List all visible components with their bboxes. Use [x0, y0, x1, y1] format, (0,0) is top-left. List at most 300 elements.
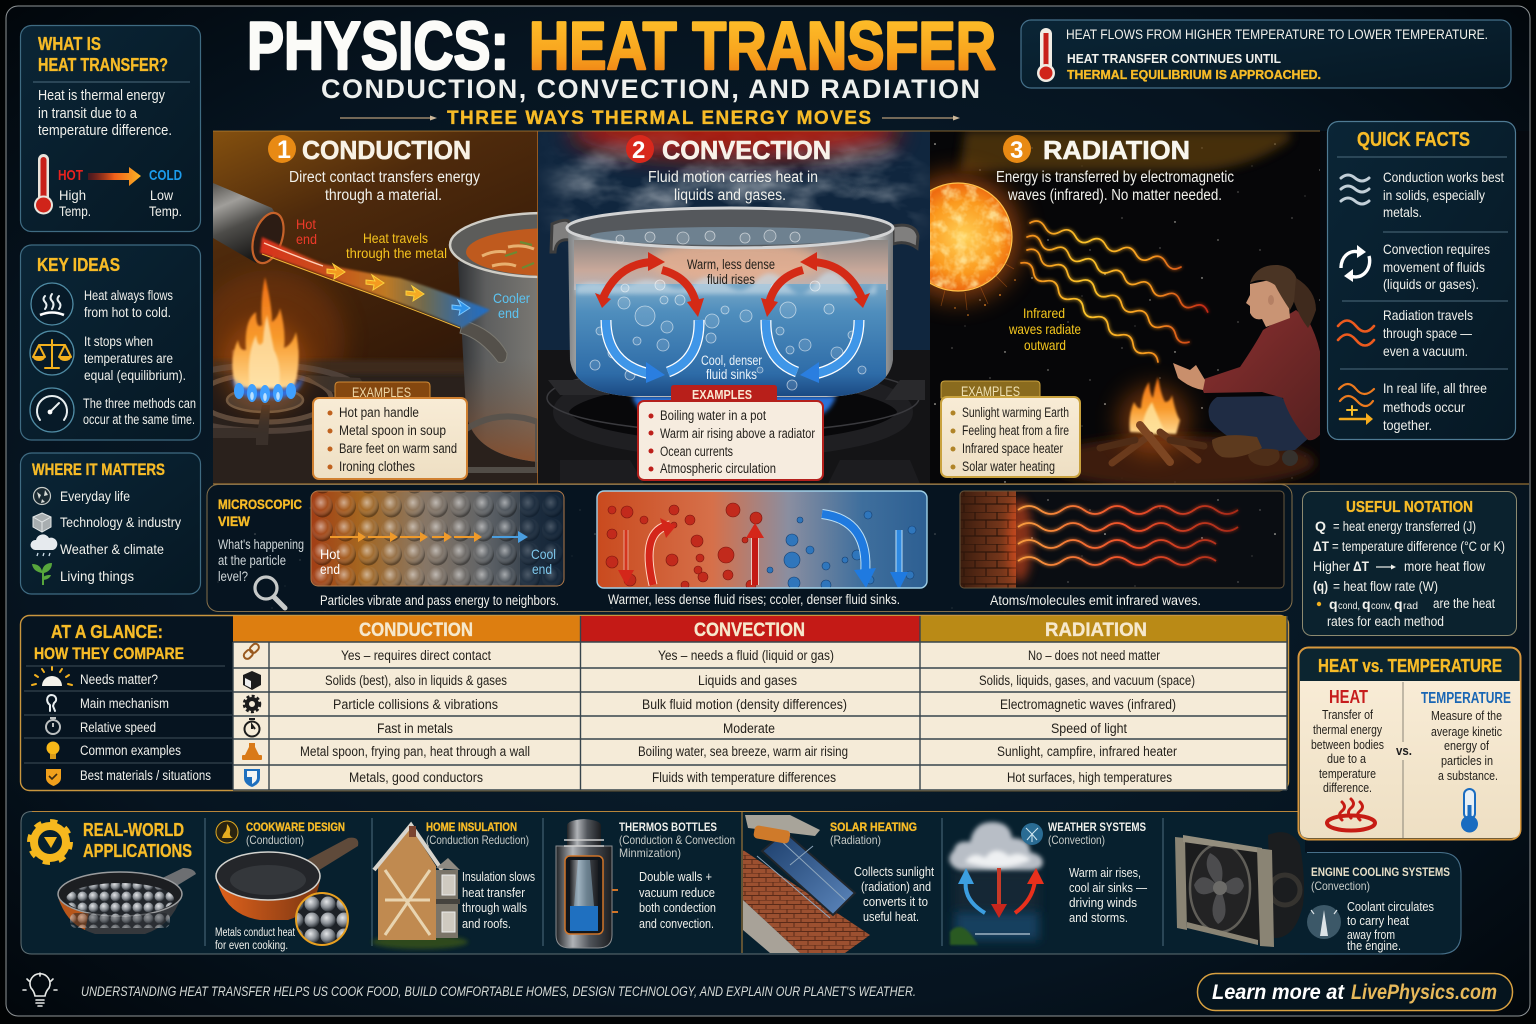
fact 1: metals. [1383, 204, 1422, 220]
weather text: driving winds [1069, 895, 1137, 910]
examples: convection: Atmospheric circulation [660, 461, 776, 476]
table header: CONVECTION [694, 620, 805, 641]
solar text: useful heat. [863, 909, 919, 924]
panel: useful notation [1302, 492, 1516, 636]
illustration: frying pan [216, 838, 358, 945]
key idea 3 text: The three methods can [83, 396, 196, 411]
callout text: HEAT TRANSFER CONTINUES UNTIL [1067, 51, 1281, 66]
label: cool fluid sinks [701, 353, 762, 382]
table row: speed: Speed of light [1051, 721, 1127, 736]
panel: where it matters: Weather & climate [60, 541, 164, 557]
notation: method rates: q [1394, 596, 1403, 612]
icon: thermometer hot [34, 154, 53, 214]
illustration: house with insulation [372, 825, 468, 949]
notation: method rates: rad [1403, 601, 1418, 612]
heading: real-world applications: REAL-WORLD [83, 820, 184, 840]
table row: needs matter [341, 648, 1160, 663]
heading: microscopic view [218, 496, 302, 529]
label: cool fluid sinks: Cool, denser [701, 353, 762, 368]
arrows: left convection cell [595, 252, 704, 383]
table icon: stopwatch [244, 719, 260, 736]
heading: engine cooling: ENGINE COOLING SYSTEMS [1311, 865, 1450, 879]
heat definition [1311, 687, 1384, 795]
microscopic intro text [218, 537, 304, 584]
temperature definition: Measure of the [1431, 709, 1502, 723]
temperature definition: energy of [1444, 739, 1489, 753]
notation: higher delta T: more heat flow [1404, 559, 1485, 574]
heading: microscopic view: MICROSCOPIC [218, 496, 302, 512]
icon: heat waves on plate [1327, 799, 1375, 830]
row icon: speed [46, 718, 60, 734]
notation: Q: = heat energy transferred (J) [1333, 519, 1476, 534]
notation: method rates: cond, [1338, 601, 1360, 612]
convection number badge [626, 135, 654, 164]
table row: materials: Metals, good conductors [349, 770, 483, 785]
table row: mechanism: Electromagnetic waves (infrared) [1000, 697, 1176, 712]
heading: at a glance: AT A GLANCE: [51, 622, 163, 642]
label: infrared waves: waves radiate [1008, 321, 1081, 337]
footer banner [23, 973, 1512, 1010]
label: hot end: end [320, 561, 340, 577]
illustration: boiling pot [551, 208, 918, 397]
cookware text: Metals conduct heat [215, 927, 296, 939]
temperature definition: average kinetic [1431, 725, 1502, 739]
panel: convection [538, 106, 930, 484]
conduction description [289, 169, 480, 204]
radiation description: Energy is transferred by electromagnetic [996, 169, 1234, 186]
solar text [854, 864, 934, 924]
examples: convection: EXAMPLES [692, 387, 752, 402]
table icon: chain [242, 642, 260, 660]
microscopic intro text: What's happening [218, 537, 304, 552]
table row: examples: Sunlight, campfire, infrared heater [997, 744, 1177, 759]
fact 4: In real life, all three [1383, 380, 1487, 396]
illustration: pot of soup [448, 212, 538, 473]
illustration: ground [1045, 436, 1315, 488]
heading: weather systems [1048, 820, 1146, 847]
table row: materials: Hot surfaces, high temperatures [1007, 770, 1172, 785]
temperature definition: a substance. [1438, 769, 1498, 783]
illustration: flame [223, 277, 307, 410]
heading: where it matters: WHERE IT MATTERS [32, 461, 165, 479]
weather text [1069, 865, 1147, 925]
panel: microscopic view [207, 484, 1292, 612]
illustration: thermos bottle [556, 819, 618, 948]
fact 3 [1383, 307, 1473, 359]
icon: gear [30, 822, 70, 862]
notation: higher delta T [1313, 558, 1485, 574]
arrows: heat flow along rod [327, 264, 470, 315]
temperature definition: particles in [1441, 754, 1493, 768]
label: cooler end [493, 290, 530, 321]
label: hot end [296, 216, 317, 247]
heading: what is heat transfer: HEAT TRANSFER? [38, 55, 168, 75]
examples: radiation [941, 381, 1080, 477]
panel: at a glance comparison [20, 616, 1288, 790]
engine cooling text: to carry heat [1347, 914, 1409, 928]
heading: weather systems: WEATHER SYSTEMS [1048, 820, 1146, 834]
table header: CONDUCTION [359, 620, 473, 641]
row icon: mechanism [47, 695, 56, 711]
panel: where it matters: Everyday life [60, 488, 130, 504]
heading: cookware design: (Conduction) [246, 833, 304, 847]
convection description: liquids and gases. [674, 187, 786, 204]
call to action: LivePhysics.com [1351, 981, 1497, 1004]
label: hot end: end [296, 231, 317, 247]
illustration: campfire [1100, 377, 1204, 463]
heading: what is heat transfer [38, 34, 168, 75]
notation: higher delta T: Higher [1313, 559, 1350, 574]
label: cooler end: Cooler [493, 290, 530, 306]
table row: states: Solids, liquids, gases, and vacuum (space) [979, 673, 1195, 688]
cookware text [215, 927, 296, 952]
heat definition: due to a [1327, 752, 1366, 766]
heading: thermos bottles [619, 820, 735, 860]
heat definition: thermal energy [1313, 723, 1383, 737]
label: warm fluid rises: fluid rises [707, 272, 755, 287]
fact 2: movement of fluids [1383, 259, 1485, 275]
table header: RADIATION [1045, 620, 1147, 641]
table row: mechanism [333, 697, 1176, 712]
label: cooler end: end [498, 305, 519, 321]
title: PHYSICS: [247, 8, 509, 84]
engine cooling text: away from [1347, 928, 1395, 942]
examples: radiation: Solar water heating [962, 459, 1055, 474]
conduction number badge [268, 135, 296, 164]
heat definition: difference. [1323, 781, 1372, 795]
label: hot end: Hot [320, 546, 340, 562]
examples: radiation: Infrared space heater [962, 441, 1063, 456]
fact 4 [1383, 380, 1487, 433]
insulation text [462, 869, 535, 931]
key idea 1 text [84, 288, 173, 320]
table icon: gear [244, 696, 260, 712]
table row: speed: Fast in metals [377, 721, 453, 736]
icon: cloud [30, 534, 57, 556]
arrows: right convection cell [761, 252, 870, 383]
label: infrared waves: Infrared [1023, 305, 1065, 321]
table row: speed [377, 721, 1127, 736]
notation: q: (q) [1313, 579, 1328, 594]
notation: delta T: = temperature difference (°C or K) [1332, 539, 1505, 554]
insulation text: through walls [462, 900, 527, 915]
examples: conduction: Ironing clothes [339, 459, 415, 474]
caption: particles: Particles vibrate and pass energy to neighbors. [320, 593, 559, 608]
panel: key ideas [20, 245, 200, 440]
heading: solar heating: (Radiation) [830, 833, 881, 847]
heading: weather systems: (Convection) [1048, 833, 1105, 847]
heading: home insulation [426, 820, 529, 847]
row label: mechanism: Main mechanism [80, 696, 169, 711]
panel: radiation [930, 131, 1320, 484]
panel: engine cooling systems [1175, 832, 1461, 954]
panel: where it matters: Living things [60, 568, 134, 584]
notation: method rates: rates for each method [1327, 614, 1444, 629]
label: cool end [531, 546, 556, 577]
arrow: hot to cold [88, 167, 141, 186]
callout text [1066, 27, 1488, 82]
examples: conduction: EXAMPLES [352, 385, 411, 400]
weather text: Warm air rises, [1069, 865, 1141, 880]
label: hot end: Hot [296, 216, 316, 232]
thermos text: vacuum reduce [639, 885, 715, 900]
title [247, 8, 1045, 129]
examples: radiation: Sunlight warming Earth [962, 405, 1069, 420]
table row: states [325, 673, 1195, 688]
table row: examples [300, 744, 1177, 759]
microscopic intro text: level? [218, 569, 248, 584]
caption: infrared: Atoms/molecules emit infrared waves. [990, 593, 1201, 608]
icon: light bulb [23, 973, 57, 1006]
illustration: radiator and fan [1175, 832, 1304, 947]
thermos text: both condection [639, 900, 716, 915]
thermos text: Double walls + [639, 869, 712, 884]
heading: quick facts: QUICK FACTS [1357, 129, 1470, 151]
convection heading: CONVECTION [662, 135, 831, 165]
key idea 2 text [84, 334, 186, 383]
icon: gauge [30, 388, 74, 432]
notation: method rates: q [1362, 596, 1371, 612]
definition text: in transit due to a [38, 106, 138, 122]
illustration: pan with metal particles [58, 868, 196, 934]
table [233, 616, 1287, 790]
heading: thermos bottles: THERMOS BOTTLES [619, 820, 717, 834]
heading: cookware design [246, 820, 345, 847]
insulation text: and roofs. [462, 916, 511, 931]
heat definition: temperature [1319, 767, 1376, 781]
examples: convection: Warm air rising above a radiator [660, 426, 815, 441]
arrow: right of tagline [882, 116, 960, 120]
chart: conduction particles [311, 491, 564, 586]
label: cool end: Cool [531, 546, 556, 562]
row icon: bulb [46, 742, 60, 759]
fact 3: through space — [1383, 325, 1472, 341]
table row: examples: Boiling water, sea breeze, warm air rising [638, 744, 848, 759]
examples: radiation: EXAMPLES [961, 384, 1020, 399]
icon: cube [33, 513, 51, 532]
hot label: HOT [58, 167, 83, 184]
icon: all three methods [1339, 384, 1374, 425]
table row: needs matter: Yes – requires direct contact [341, 648, 491, 663]
call to action: Learn more at [1212, 981, 1345, 1004]
heading: heat vs temperature: HEAT vs. TEMPERATURE [1318, 655, 1502, 676]
cold label: Low [150, 187, 174, 203]
hot label [58, 167, 91, 219]
icon: thermometer [1037, 28, 1055, 82]
examples: conduction: Bare feet on warm sand [339, 441, 457, 456]
panel: where it matters [20, 453, 200, 594]
chart: fluid particles [597, 491, 927, 590]
table row: needs matter: No – does not need matter [1028, 648, 1160, 663]
table row: states: Liquids and gases [698, 673, 797, 688]
subtitle: CONDUCTION, CONVECTION, AND RADIATION [321, 74, 980, 104]
row icon: needs matter [32, 667, 72, 686]
notation: Q: Q [1315, 518, 1326, 534]
key idea 2 text: temperatures are [84, 351, 173, 366]
temperature definition: TEMPERATURE [1421, 690, 1511, 707]
panel: heat vs temperature [1298, 648, 1520, 840]
conduction number badge: 1 [277, 136, 291, 164]
thermos text [639, 869, 716, 931]
key idea 2 text: It stops when [84, 334, 153, 349]
row label: speed: Relative speed [80, 720, 156, 735]
label: heat travels: Heat travels [363, 230, 428, 246]
illustration: solar panels on roof [743, 815, 870, 953]
icon: radiation waves [1338, 320, 1374, 346]
panel: where it matters: Technology & industry [60, 514, 181, 530]
heat definition: between bodies [1311, 738, 1384, 752]
notation: method rates: conv, [1371, 601, 1392, 612]
label: warm fluid rises: Warm, less dense [687, 257, 775, 272]
heat definition: Transfer of [1322, 708, 1373, 722]
table row: speed: Moderate [723, 721, 775, 736]
icon: cookware [216, 821, 238, 843]
footer message: UNDERSTANDING HEAT TRANSFER HELPS US COOK FOOD, BUILD COMFORTABLE HOMES, DESIGN TECHNOLOGY, AND EXPLAIN OUR PLANET'S WEATHER. [81, 984, 916, 999]
illustration: sun [894, 173, 1022, 316]
icon: magnifier [255, 577, 285, 608]
conduction description: Direct contact transfers energy [289, 169, 480, 186]
key idea 1 text: Heat always flows [84, 288, 173, 303]
fact 4: together. [1383, 417, 1432, 433]
notation: q: = heat flow rate (W) [1333, 579, 1438, 594]
illustration: steam [560, 150, 915, 230]
definition text: Heat is thermal energy [38, 88, 166, 104]
fact 1: in solids, especially [1383, 187, 1485, 203]
icon: coolant circle [1307, 905, 1341, 939]
convection description: Fluid motion carries heat in [648, 169, 818, 186]
callout text: THERMAL EQUILIBRIUM IS APPROACHED. [1067, 67, 1321, 82]
key idea 2 text: equal (equilibrium). [84, 368, 186, 383]
hot label: Temp. [59, 203, 91, 219]
label: heat travels: through the metal [346, 245, 447, 261]
icon: convection cycle [1341, 245, 1370, 282]
table row: needs matter: Yes – needs a fluid (liquid or gas) [658, 648, 834, 663]
fact 3: Radiation travels [1383, 307, 1473, 323]
insulation text: heat transfer [462, 885, 526, 900]
icon: conduction waves [1341, 175, 1369, 204]
microscopic intro text: at the particle [218, 553, 286, 568]
heading: microscopic view: VIEW [218, 513, 251, 529]
icon: globe [34, 488, 50, 504]
table header [359, 620, 1147, 641]
table row: materials [349, 770, 1172, 785]
definition text: temperature difference. [38, 123, 172, 139]
definition text [38, 88, 172, 139]
heading: solar heating [830, 820, 917, 847]
engine cooling text [1347, 900, 1434, 953]
heading: engine cooling: (Convection) [1311, 879, 1370, 893]
panel: conduction [213, 131, 538, 484]
heading: real-world applications [83, 820, 192, 861]
arrow: left of tagline [340, 116, 437, 120]
radiation number badge [1003, 135, 1031, 164]
label: cool fluid sinks: fluid sinks [706, 367, 757, 382]
fact 4: methods occur [1383, 399, 1465, 415]
label: cool end: end [532, 561, 552, 577]
callout text: HEAT FLOWS FROM HIGHER TEMPERATURE TO LOWER TEMPERATURE. [1066, 27, 1488, 42]
hot label: High [59, 187, 86, 203]
label: hot end [320, 546, 340, 577]
examples: convection [638, 385, 823, 480]
tagline: THREE WAYS THERMAL ENERGY MOVES [447, 108, 871, 129]
call to action [1198, 974, 1512, 1010]
temperature definition [1421, 690, 1511, 783]
cookware text: for even cooking. [215, 940, 288, 952]
examples: convection: Ocean currents [660, 444, 733, 459]
callout: heat flow rule [1021, 20, 1511, 88]
illustration: spoon handle tube [213, 183, 289, 267]
caption: fluid: Warmer, less dense fluid rises; ccoler, denser fluid sinks. [608, 592, 900, 607]
cold label [149, 167, 182, 219]
table row: materials: Fluids with temperature differences [652, 770, 836, 785]
heading: useful notation: USEFUL NOTATION [1346, 499, 1473, 516]
weather text: and storms. [1069, 910, 1128, 925]
radiation heading: RADIATION [1043, 135, 1190, 165]
fact 1: Conduction works best [1383, 169, 1504, 185]
examples: conduction: Metal spoon in soup [339, 423, 446, 438]
heading: thermos bottles: (Conduction & Convection [619, 833, 735, 847]
icon: rising heat [31, 283, 73, 325]
notation: delta T: ΔT [1313, 538, 1329, 554]
key idea 3 text: occur at the same time. [83, 412, 195, 427]
icon: thermometer blue [1461, 789, 1478, 832]
label: infrared waves [1008, 305, 1081, 353]
convection number badge: 2 [632, 137, 645, 164]
heading: what is heat transfer: WHAT IS [38, 34, 101, 54]
key idea 3 text [83, 396, 196, 427]
heading: solar heating: SOLAR HEATING [830, 820, 917, 834]
panel: quick facts [1328, 122, 1516, 440]
row icon: shield [46, 769, 61, 786]
examples: conduction: Hot pan handle [339, 405, 419, 420]
table icon: burner [242, 743, 262, 760]
radiation description: waves (infrared). No matter needed. [1007, 187, 1222, 204]
panel: real-world applications [21, 811, 1310, 954]
insulation text: Insulation slows [462, 869, 535, 884]
fact 2: (liquids or gases). [1383, 276, 1479, 292]
fact 2 [1383, 241, 1490, 292]
icon: balance scale [30, 331, 74, 375]
row label: examples: Common examples [80, 743, 181, 758]
radiation number badge: 3 [1010, 137, 1023, 164]
convection description [648, 169, 818, 204]
heading: cookware design: COOKWARE DESIGN [246, 820, 345, 834]
heading: real-world applications: APPLICATIONS [83, 841, 192, 861]
label: heat travels [346, 230, 447, 261]
notation: method rates [1317, 596, 1495, 629]
conduction description: through a material. [325, 187, 442, 204]
examples: convection: Boiling water in a pot [660, 408, 766, 423]
heat definition: HEAT [1329, 687, 1368, 707]
heading: home insulation: HOME INSULATION [426, 820, 517, 834]
row label: needs matter: Needs matter? [80, 672, 158, 687]
heading: at a glance [34, 622, 184, 663]
fact 1 [1383, 169, 1504, 220]
illustration: person warming hands [1173, 265, 1326, 466]
examples: conduction [313, 382, 467, 479]
thermos text: and convection. [639, 916, 714, 931]
radiation description [996, 169, 1234, 204]
weather text: cool air sinks — [1069, 880, 1147, 895]
row label: materials: Best materials / situations [80, 768, 211, 783]
key idea 1 text: from hot to cold. [84, 305, 171, 320]
illustration: heated metal rod [260, 237, 490, 328]
table icon: cube [243, 671, 261, 690]
cold label: Temp. [149, 203, 182, 219]
table row: states: Solids (best), also in liquids & gases [325, 673, 507, 688]
notation: higher delta T: ΔT [1353, 558, 1369, 574]
table row: mechanism: Particle collisions & vibrations [333, 697, 498, 712]
